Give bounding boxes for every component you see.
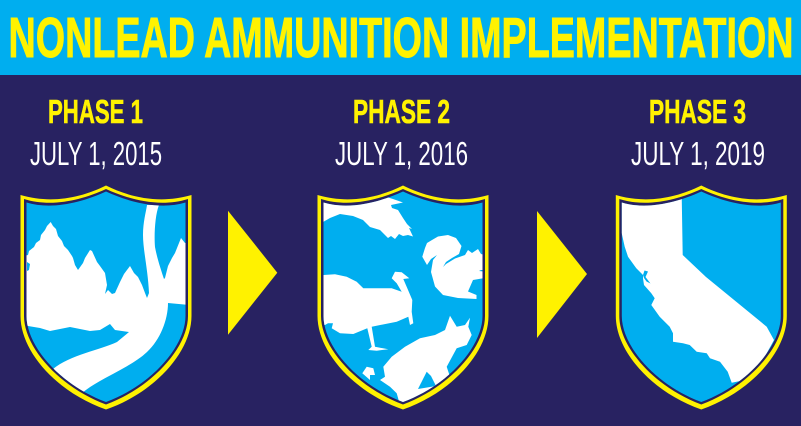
phase 3 heading: PHASE 3 [649, 94, 746, 131]
gap between lynx legs [418, 372, 436, 389]
California silhouette [618, 195, 774, 383]
arrow 1 [228, 211, 277, 335]
tree-line notch [27, 262, 30, 271]
phase 2 heading: PHASE 2 [353, 94, 450, 131]
turkey silhouette [318, 272, 413, 351]
shield: California map [616, 186, 787, 410]
arrow 2 [537, 211, 587, 338]
forest and river silhouette [22, 205, 190, 393]
shield: forest and river [20, 186, 192, 410]
lynx silhouette [362, 316, 472, 405]
title banner [0, 0, 801, 75]
shield: wildlife [318, 186, 490, 410]
phase 2 date: JULY 1, 2016 [335, 135, 468, 172]
San Francisco Bay inlet [643, 270, 650, 284]
phase 1 heading: PHASE 1 [48, 94, 143, 131]
phase 1 date: JULY 1, 2015 [30, 135, 162, 172]
squirrel silhouette [422, 235, 482, 299]
bird silhouette [324, 198, 413, 239]
